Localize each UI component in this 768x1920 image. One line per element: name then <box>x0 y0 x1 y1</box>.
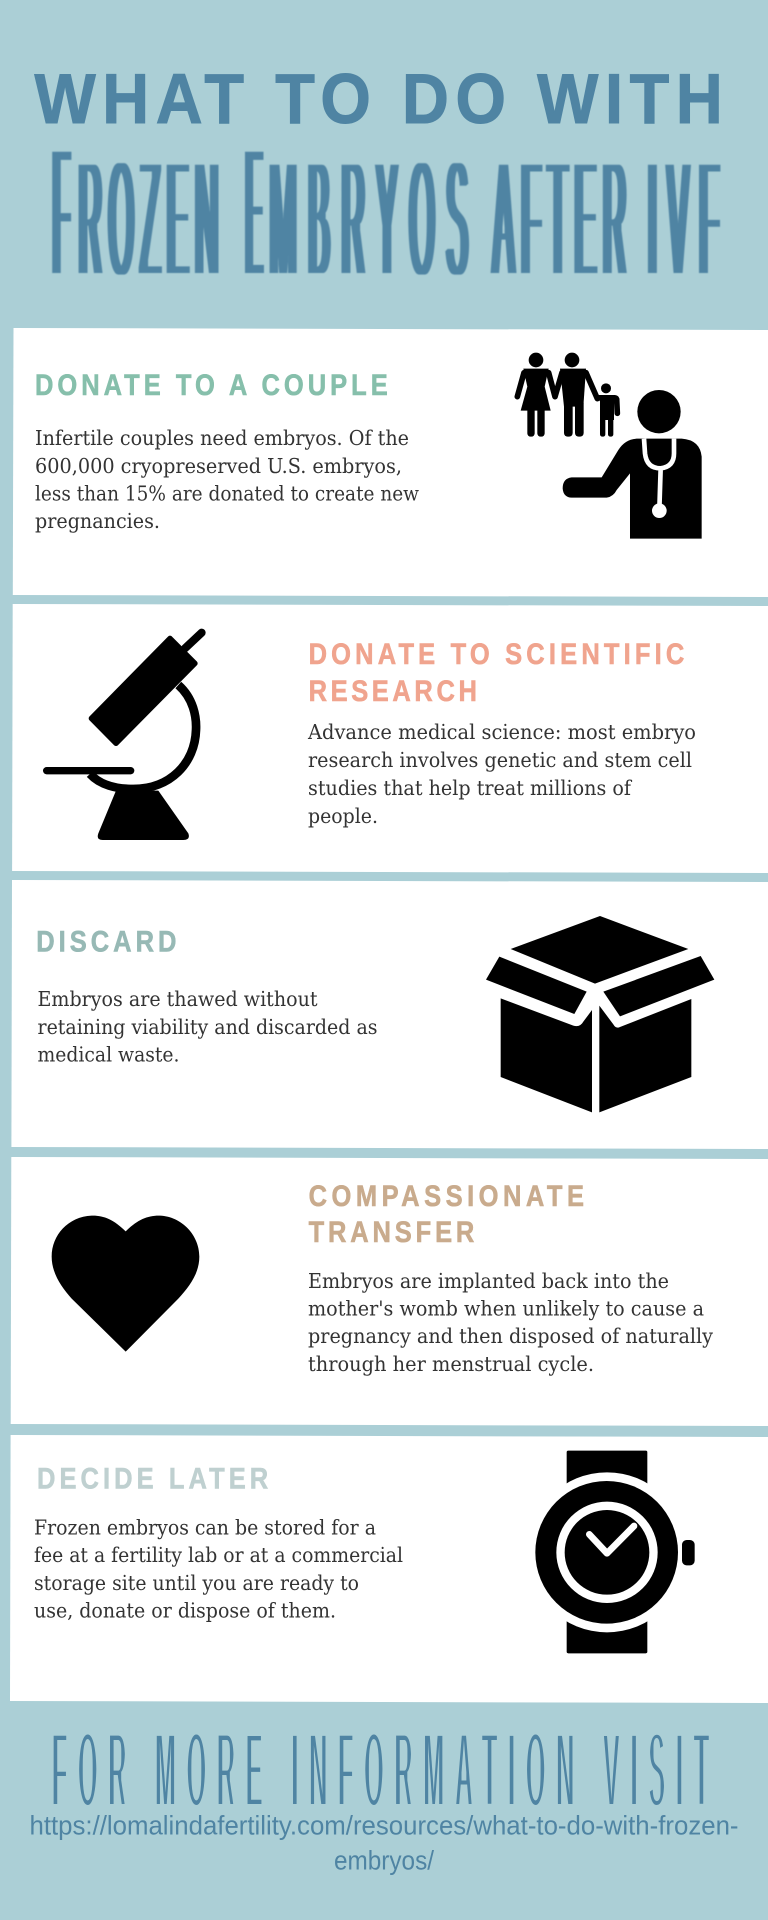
footer url <box>30 1810 738 1876</box>
panel: decide later <box>10 1435 768 1703</box>
text: discard <box>38 987 378 1066</box>
text: donate to a couple: Infertile couples need embryos. Of the <box>35 426 409 450</box>
text: donate to scientific research: studies that help treat millions of <box>308 776 632 800</box>
heading: compassionate transfer <box>309 1179 584 1248</box>
panel: donate to a couple <box>13 328 768 597</box>
icon: microscope <box>47 633 202 840</box>
title line 2: E <box>246 110 262 316</box>
heading: donate to scientific research: DONATE TO SCIENTIFIC <box>309 637 684 670</box>
text: donate to scientific research: research involves genetic and stem cell <box>308 748 692 772</box>
text: compassionate transfer: pregnancy and then disposed of naturally <box>308 1324 713 1348</box>
text: donate to a couple <box>35 426 419 533</box>
panel: donate to scientific research <box>12 604 768 873</box>
text: donate to scientific research: Advance medical science: most embryo <box>307 720 696 744</box>
heading: donate to scientific research <box>309 637 684 707</box>
heading: compassionate transfer: COMPASSIONATE <box>309 1179 584 1212</box>
footer url: embryos/ <box>334 1846 434 1876</box>
text: discard: medical waste. <box>38 1042 180 1066</box>
text: decide later: Frozen embryos can be stored for a <box>34 1516 376 1540</box>
heading: discard: DISCARD <box>36 925 176 958</box>
heading: decide later: DECIDE LATER <box>37 1462 268 1495</box>
text: donate to a couple: less than 15% are donated to create new <box>35 482 419 506</box>
text: compassionate transfer: mother's womb when unlikely to cause a <box>308 1296 704 1320</box>
text: decide later: fee at a fertility lab or at a commercial <box>34 1543 403 1567</box>
icon: heart <box>52 1216 199 1352</box>
text: donate to a couple: pregnancies. <box>35 509 160 533</box>
text: decide later: storage site until you are ready to <box>34 1571 359 1595</box>
text: donate to scientific research: people. <box>308 804 378 828</box>
heading: compassionate transfer: TRANSFER <box>309 1215 474 1248</box>
title line 2: F <box>53 110 70 316</box>
title line 2: IVF <box>648 127 719 312</box>
panel: discard <box>11 880 768 1149</box>
text: decide later: use, donate or dispose of them. <box>34 1598 336 1622</box>
text: donate to scientific research <box>307 720 696 828</box>
footer url: https://lomalindafertility.com/resources/what-to-do-with-frozen- <box>30 1810 738 1840</box>
heading: donate to a couple: DONATE TO A COUPLE <box>35 368 388 401</box>
icon: wristwatch <box>527 1451 695 1653</box>
icon: open box <box>486 916 714 1112</box>
title <box>34 61 723 316</box>
text: compassionate transfer: Embryos are implanted back into the <box>308 1269 669 1293</box>
icon: doctor with family <box>517 353 702 539</box>
title line 2: ROZEN <box>79 127 218 312</box>
title line 1: WHAT TO DO WITH <box>34 61 723 139</box>
text: donate to a couple: 600,000 cryopreserved U.S. embryos, <box>35 454 402 478</box>
text: decide later <box>34 1516 403 1622</box>
text: compassionate transfer: through her menstrual cycle. <box>308 1352 594 1376</box>
text: discard: Embryos are thawed without <box>38 987 318 1011</box>
title line 2: MBRYOS <box>270 127 468 312</box>
text: discard: retaining viability and discarded as <box>38 1015 378 1039</box>
title line 2: AFTER <box>493 127 626 312</box>
panel: compassionate transfer <box>11 1157 768 1426</box>
heading: donate to scientific research: RESEARCH <box>309 674 477 707</box>
title line 2 <box>53 110 719 316</box>
text: compassionate transfer <box>308 1269 713 1376</box>
footer heading: FOR MORE INFORMATION VISIT <box>52 1709 709 1831</box>
